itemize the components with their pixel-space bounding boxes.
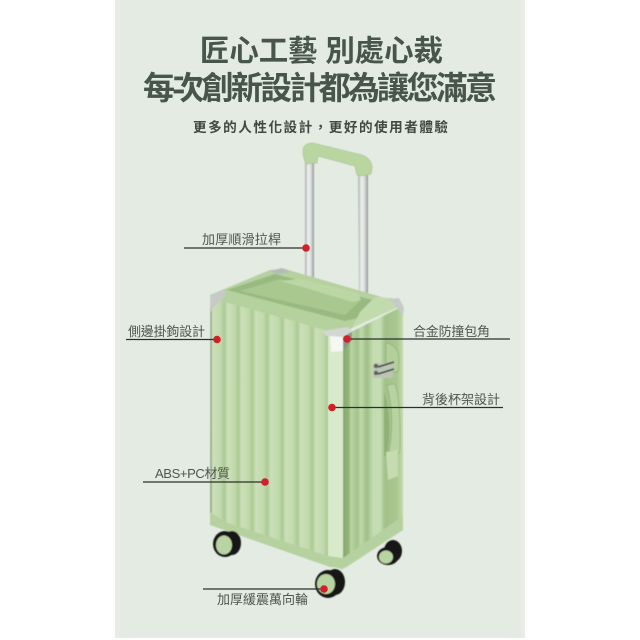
wheel: front centre [315, 569, 345, 598]
side panel [343, 306, 403, 568]
callout: 合金防撞包角 [343, 324, 510, 343]
callout: 合金防撞包角: 合金防撞包角 [413, 324, 490, 339]
background panel [115, 0, 525, 638]
callout: 側邊掛鉤設計: 側邊掛鉤設計 [128, 324, 205, 339]
combination lock [373, 362, 394, 378]
side carry handle [384, 343, 400, 480]
callout: 加厚順滑拉桿: 加厚順滑拉桿 [202, 232, 281, 247]
callout: 側邊掛鉤設計 [126, 324, 221, 343]
title: 匠心工藝 別處心裁 [200, 35, 443, 68]
title: 每次創新設計都為讓您滿意 [143, 70, 497, 106]
callout: 背後杯架設計 [328, 392, 503, 411]
wheel: front left [213, 531, 241, 557]
metal corner guards [210, 268, 404, 352]
callout: 加厚緩震萬向輪 [203, 585, 328, 607]
wheel: rear right [377, 540, 402, 565]
handle grip [303, 143, 372, 176]
callout: 背後杯架設計: 背後杯架設計 [422, 392, 500, 407]
bottom rim [210, 512, 403, 568]
top face [210, 269, 403, 336]
callout: 加厚緩震萬向輪: 加厚緩震萬向輪 [217, 592, 308, 607]
callout: 加厚順滑拉桿 [184, 232, 310, 252]
suitcase illustration [210, 143, 404, 598]
front ribbed face [210, 298, 343, 570]
callout: ABS+PC材質 [143, 466, 269, 486]
subtitle: 更多的人性化設計，更好的使用者體驗 [193, 119, 448, 135]
callout: ABS+PC材質: ABS+PC材質 [155, 466, 230, 481]
telescopic handle tubes [305, 160, 368, 300]
title [143, 35, 497, 106]
